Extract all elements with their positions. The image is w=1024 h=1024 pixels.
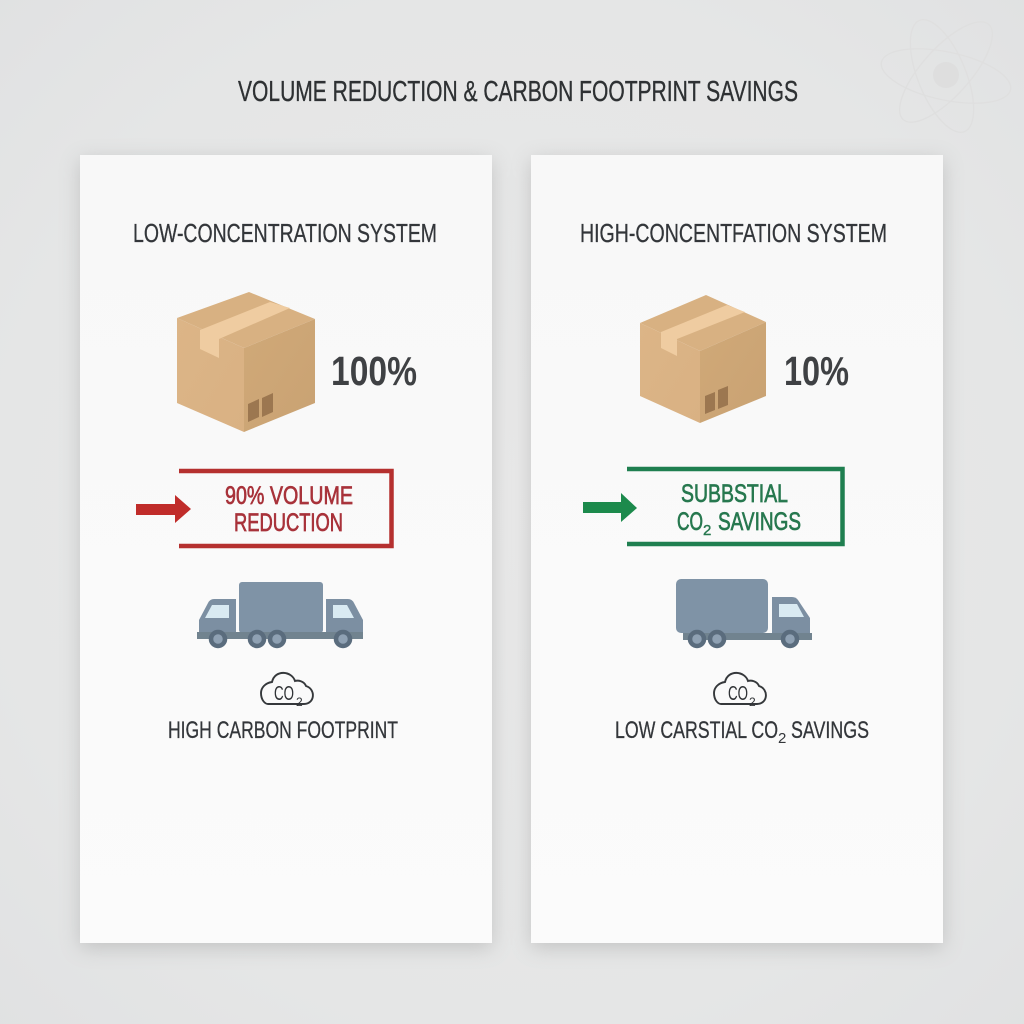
- icon: double-cab truck: [197, 582, 363, 646]
- stat: 10%: 10%: [784, 348, 849, 394]
- icon: CO2 cloud: CO: [728, 683, 748, 705]
- panel: high-concentration system: [531, 155, 943, 948]
- callout: substantial CO2 savings: SUBBSTIAL: [681, 480, 788, 508]
- panel: low-concentration system: [80, 155, 492, 948]
- icon: single-cab truck: [676, 579, 812, 646]
- callout: substantial CO2 savings: CO: [677, 508, 703, 536]
- icon: CO2 cloud: [714, 673, 766, 709]
- heading: low-concentration system: LOW-CONCENTRATION SYSTEM: [133, 218, 437, 248]
- arrow: red: [136, 495, 191, 523]
- icon: CO2 cloud: [261, 673, 313, 709]
- callout: 90% volume reduction: 90% VOLUME: [225, 482, 353, 510]
- callout: substantial CO2 savings: 2: [703, 522, 711, 539]
- callout: substantial CO2 savings: [627, 469, 842, 544]
- icon: large cardboard box: [177, 292, 315, 432]
- label: low carstial CO2 savings: LOW CARSTIAL CO: [615, 717, 778, 744]
- icon: CO2 cloud: 2: [296, 695, 303, 709]
- heading: high-concentration system: HIGH-CONCENTFATION SYSTEM: [580, 218, 887, 248]
- icon: faint atom watermark: [876, 8, 1016, 141]
- label: high carbon footprint: HIGH CARBON FOOTPRINT: [168, 717, 398, 744]
- title: VOLUME REDUCTION & CARBON FOOTPRINT SAVINGS: [238, 76, 798, 108]
- icon: small cardboard box: [640, 295, 766, 423]
- icon: CO2 cloud: 2: [749, 695, 756, 709]
- callout: 90% volume reduction: REDUCTION: [234, 509, 343, 537]
- arrow: green: [583, 493, 637, 522]
- callout: 90% volume reduction: [179, 471, 392, 546]
- label: low carstial CO2 savings: SAVINGS: [791, 717, 869, 744]
- label: low carstial CO2 savings: 2: [778, 730, 786, 747]
- callout: substantial CO2 savings: SAVINGS: [718, 508, 801, 536]
- stat: 100%: 100%: [331, 348, 417, 394]
- icon: CO2 cloud: CO: [274, 683, 294, 705]
